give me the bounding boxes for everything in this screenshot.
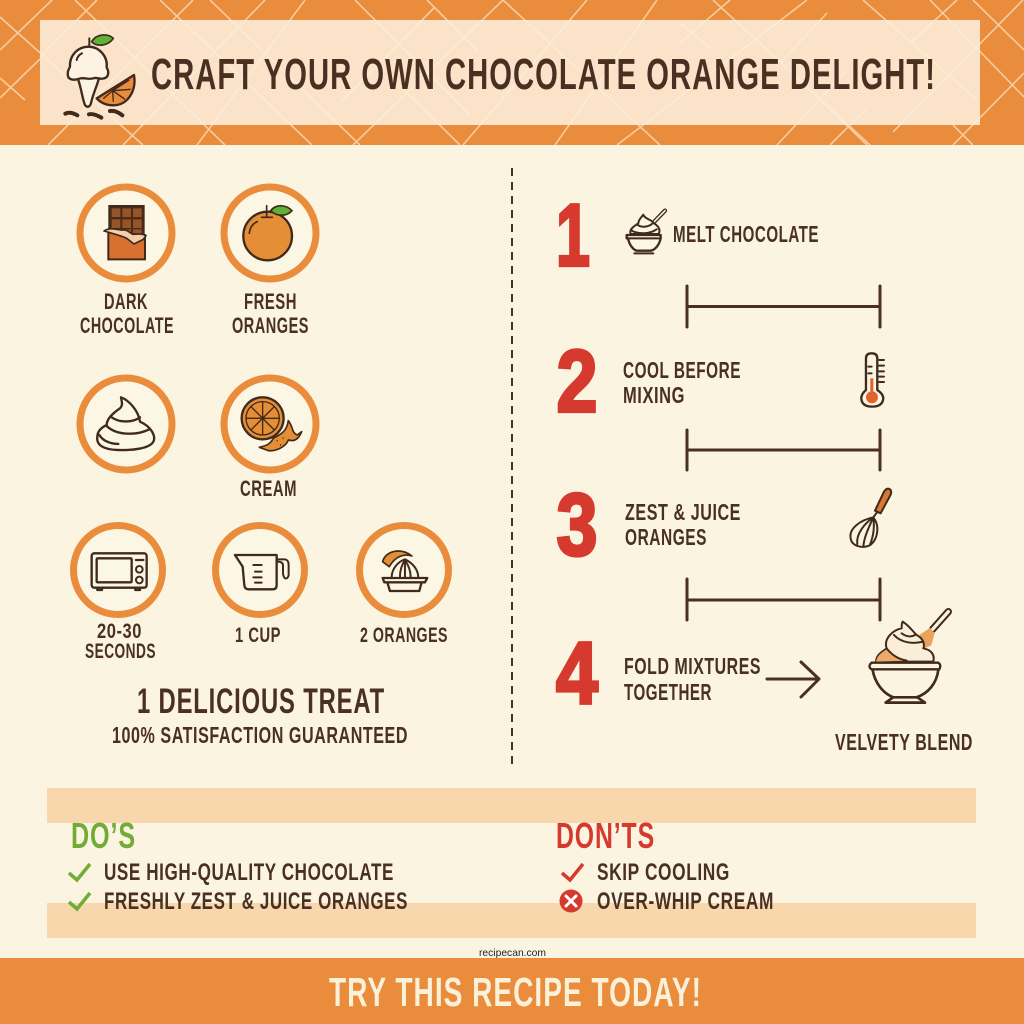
source credit: recipecan.com [479,947,546,959]
icon: check [69,864,90,880]
don't item 2: OVER-WHIP CREAM [597,888,774,915]
icon: thermometer [861,353,884,407]
connector 3 [687,579,880,620]
header banner [0,0,1024,145]
footer banner [0,958,1024,1024]
ingredient: dark chocolate: DARK [104,289,148,314]
label: MIXING [623,382,685,408]
footer banner: TRY THIS RECIPE TODAY! [329,969,702,1015]
number 4: 4 [556,624,598,722]
ingredient: dark chocolate: CHOCOLATE [80,313,174,338]
don't item 1: SKIP COOLING [597,859,730,886]
arrow [767,662,819,697]
do's heading: DO’S [71,815,136,856]
quantity: two oranges juicer [360,526,448,647]
label: MELT CHOCOLATE [673,221,819,247]
do item 2: FRESHLY ZEST & JUICE ORANGES [104,888,408,915]
do item 1: USE HIGH-QUALITY CHOCOLATE [104,859,394,886]
don'ts column [556,815,774,915]
icon: bowl with spoon [627,211,665,253]
ingredient: fresh oranges: ORANGES [232,313,309,338]
quantity: two oranges juicer: 2 ORANGES [360,624,448,647]
ingredient: fresh oranges: FRESH [244,289,297,314]
label: COOL BEFORE [623,357,741,383]
number 3: 3 [556,475,598,574]
panel: ingredients [74,187,448,748]
quantity: one cup: 1 CUP [235,624,281,647]
label: FOLD MIXTURES [624,653,761,679]
panel: steps [556,186,973,755]
connector 1 [687,286,880,327]
step 1 [556,186,819,284]
panel: do's and don'ts [47,788,976,938]
quantity: microwave time: SECONDS [85,640,156,663]
label: ORANGES [625,524,707,550]
number 1: 1 [556,186,590,284]
icon: red check [562,864,583,880]
step 2 [556,332,884,430]
heading: result: 1 DELICIOUS TREAT [137,682,385,721]
icon: check [69,893,90,909]
subheading: guarantee: 100% SATISFACTION GUARANTEED [112,722,408,748]
icon: red cross [560,890,582,912]
ingredient: cream with orange slice: CREAM [240,476,297,501]
icon: velvety blend bowl [869,612,948,703]
quantity: microwave time [74,526,162,663]
ingredient: whipped cream icon [80,378,172,470]
icon: ice cream with orange slice [65,35,134,118]
quantity: one cup [216,526,304,647]
label: ZEST & JUICE [625,499,741,525]
step 3 [556,475,891,574]
step 4 [556,624,819,722]
connector 2 [687,430,880,470]
label: TOGETHER [624,679,712,705]
ingredient: dark chocolate [80,187,174,338]
icon: whisk [850,489,891,547]
ingredient: cream with orange slice [224,378,316,501]
number 2: 2 [556,332,598,430]
ingredient: fresh oranges [224,187,316,338]
don'ts heading: DON’TS [556,815,655,856]
quantity: microwave time: 20-30 [97,620,142,643]
do's column [69,815,408,915]
